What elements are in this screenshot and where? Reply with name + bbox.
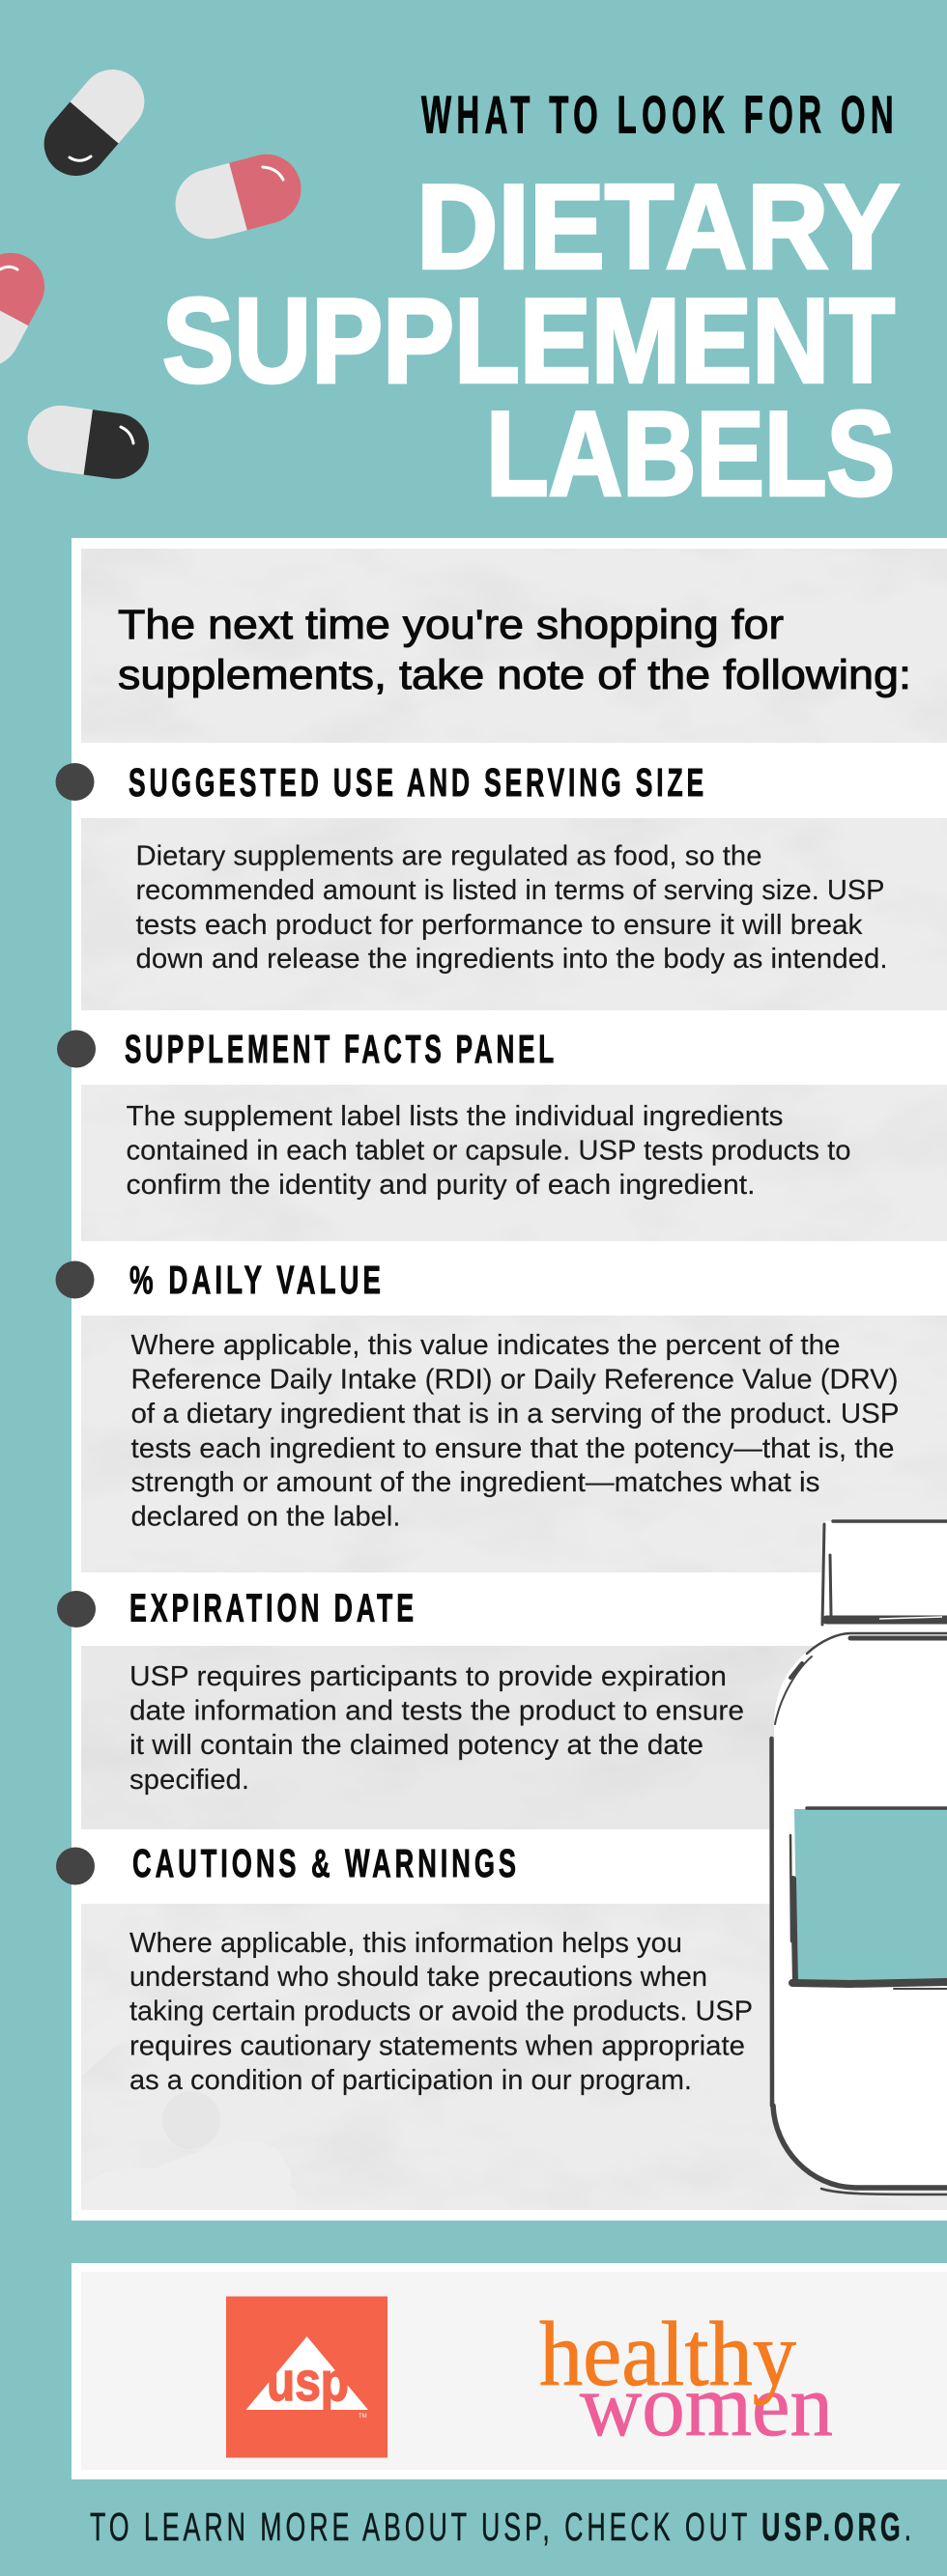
icon: black and white pill, top: [31, 56, 158, 189]
illustration: supplement bottle: [771, 1521, 947, 2194]
logo: usp: TM: [359, 2414, 367, 2420]
body text: [129, 1928, 753, 2096]
intro text: [118, 602, 911, 698]
body text: [131, 1330, 899, 1532]
section: supplement facts panel: [57, 1027, 851, 1201]
intro text: The next time you're shopping for: [118, 602, 784, 648]
section: percent daily value: [56, 1258, 899, 1532]
body text: The supplement label lists the individual ingredients: [126, 1101, 783, 1132]
timeline dot: [56, 763, 95, 801]
body text: USP requires participants to provide expiration: [129, 1661, 727, 1692]
logo: healthy women: healthy: [539, 2303, 796, 2405]
panel: main white card: [72, 538, 947, 2221]
body text: Reference Daily Intake (RDI) or Daily Reference Value (DRV): [131, 1364, 899, 1395]
body text: down and release the ingredients into the body as intended.: [135, 944, 887, 975]
pills illustration: [0, 56, 309, 483]
icon: red and white pill, upper right: [167, 147, 309, 246]
body text: Where applicable, this information helps you: [129, 1928, 682, 1959]
icon: black and white pill, bottom: [23, 401, 153, 483]
body text: strength or amount of the ingredient—matches what is: [131, 1467, 820, 1498]
body text: it will contain the claimed potency at the date: [129, 1730, 703, 1761]
title: [162, 85, 900, 522]
panel: textured grey section backgrounds: [81, 549, 947, 2210]
body text: date information and tests the product to ensure: [129, 1696, 744, 1727]
section: cautions and warnings: [56, 1841, 753, 2096]
timeline dot: [56, 1847, 95, 1885]
panel: logo card: [72, 2263, 947, 2479]
logo: usp: [226, 2297, 387, 2457]
body text: tests each ingredient to ensure that the potency—that is, the: [131, 1433, 895, 1464]
heading: EXPIRATION DATE: [129, 1586, 417, 1630]
heading: % DAILY VALUE: [129, 1258, 385, 1302]
section: suggested use and serving size: [56, 760, 887, 975]
intro text: supplements, take note of the following:: [118, 652, 911, 698]
body text: as a condition of participation in our program.: [129, 2065, 692, 2096]
heading: CAUTIONS & WARNINGS: [132, 1841, 520, 1885]
body text: [129, 1661, 744, 1796]
body text: Where applicable, this value indicates the percent of the: [131, 1330, 841, 1361]
logo: healthy women: women: [580, 2356, 833, 2454]
body text: recommended amount is listed in terms of serving size. USP: [135, 875, 885, 906]
timeline dot: [57, 1030, 96, 1068]
body text: requires cautionary statements when appropriate: [129, 2030, 745, 2061]
body text: [135, 840, 887, 975]
body text: taking certain products or avoid the products. USP: [129, 1996, 753, 2026]
watercolor stains in last panel: [81, 2004, 297, 2210]
body text: Dietary supplements are regulated as food, so the: [135, 840, 761, 871]
section: expiration date: [57, 1586, 744, 1796]
logo: healthy women: [539, 2303, 833, 2454]
bottle cap: [822, 1521, 947, 1625]
body text: tests each product for performance to ensure it will break: [135, 910, 863, 941]
body text: confirm the identity and purity of each ingredient.: [126, 1170, 756, 1201]
bottle label: [790, 1808, 947, 1989]
body text: specified.: [129, 1765, 249, 1796]
body text: understand who should take precautions when: [129, 1962, 707, 1993]
logo: usp: usp: [267, 2351, 349, 2413]
heading: SUPPLEMENT FACTS PANEL: [125, 1027, 558, 1071]
body text: contained in each tablet or capsule. USP tests products to: [126, 1136, 851, 1167]
timeline dot: [56, 1261, 95, 1298]
icon: red and white pill, cut by left edge: [0, 241, 56, 379]
title line 1: DIETARY: [416, 160, 900, 294]
body text: [126, 1101, 851, 1201]
body text: declared on the label.: [131, 1501, 400, 1532]
bottle body: [771, 1633, 947, 2194]
timeline dot: [57, 1591, 96, 1628]
body text: of a dietary ingredient that is in a serving of the product. USP: [131, 1399, 899, 1430]
